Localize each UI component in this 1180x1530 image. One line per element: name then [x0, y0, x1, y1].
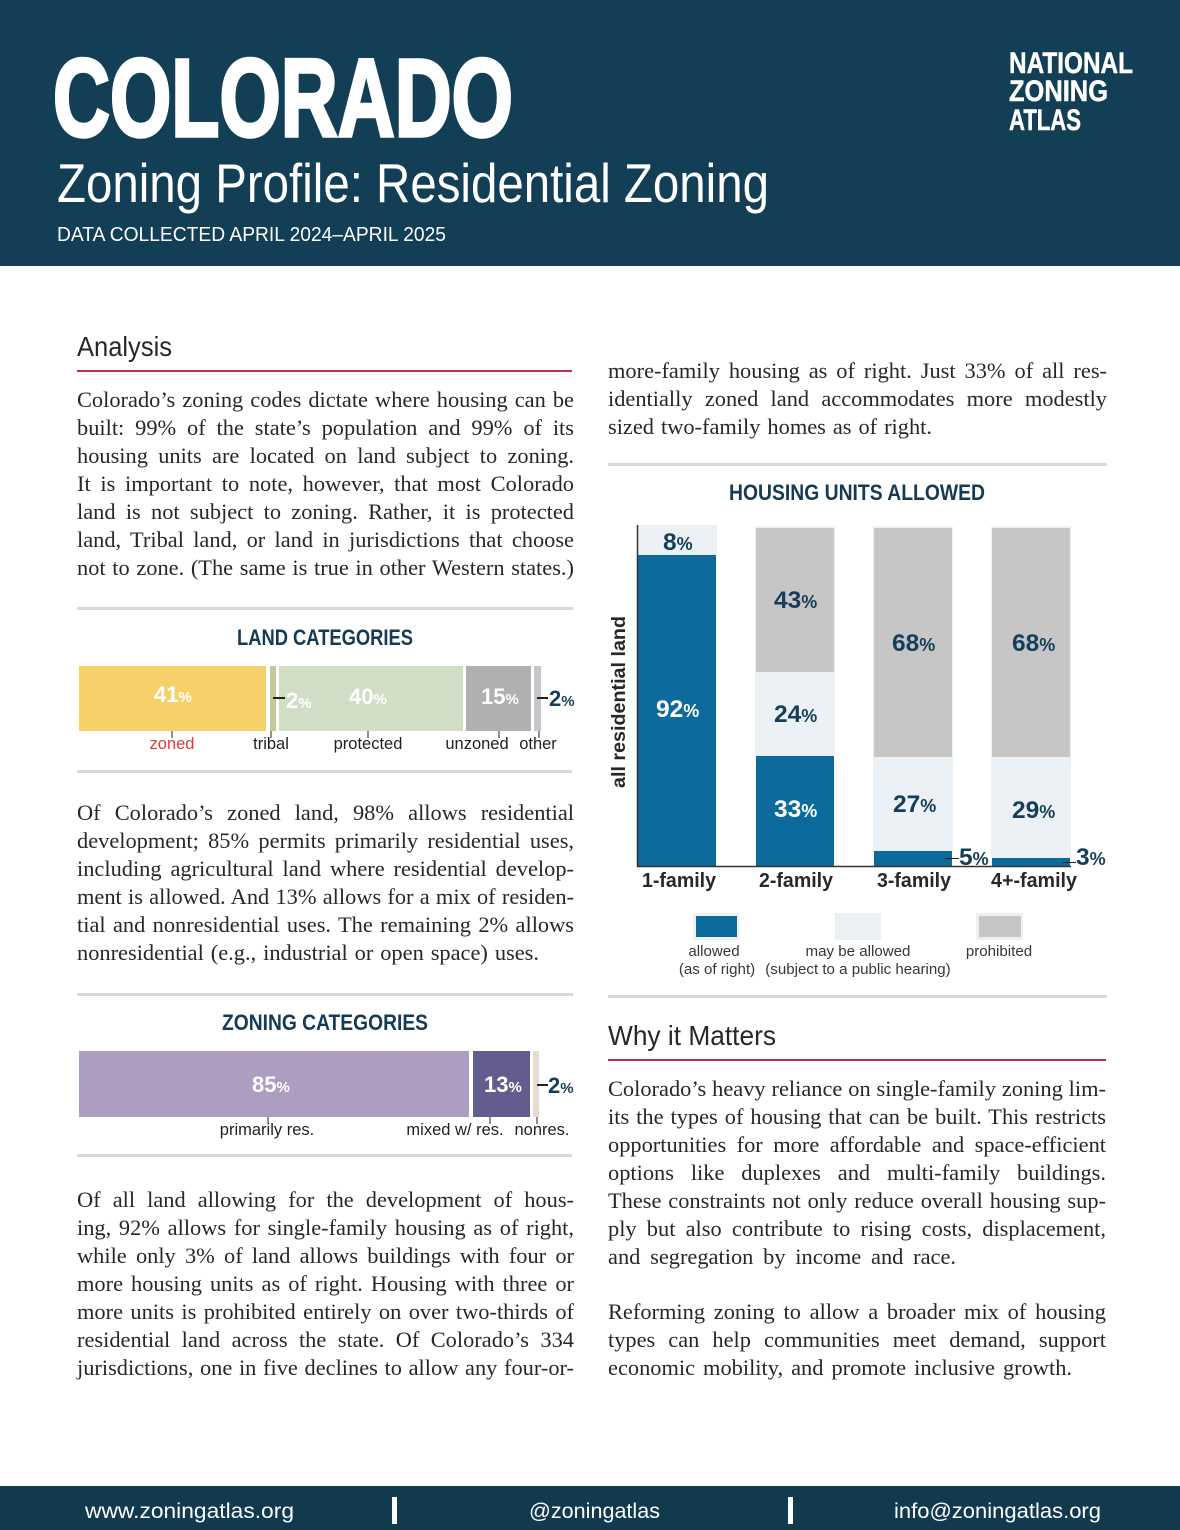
y axis label: all residential land: [609, 616, 630, 788]
axes: [638, 525, 1071, 866]
text block: why it matters: Colorado’s heavy reliance on single-family zoning lim-: [608, 1076, 1106, 1101]
chart: zoning categories: nonres.: [514, 1121, 570, 1139]
logo: National Zoning Atlas: ATLAS: [1009, 104, 1081, 137]
chart: zoning categories: 85%: [252, 1072, 290, 1097]
chart: land categories: 2%: [286, 688, 312, 713]
heading: Analysis: Analysis: [77, 331, 172, 362]
text block: residential land: [76, 1187, 574, 1380]
legend: allowed: [688, 943, 740, 960]
text block: analysis continued: identially zoned land accommodates more modestly: [608, 386, 1107, 411]
bar: 3-family: 68%: [892, 630, 935, 657]
text block: reforming zoning: economic mobility, and promote inclusive growth.: [608, 1355, 1072, 1380]
bar: 1-family: 92%: [656, 696, 699, 723]
text block: analysis intro: It is important to note, however, that most Colorado: [77, 471, 574, 496]
text block: residential land: while only 3% of land allows buildings with four or: [77, 1243, 574, 1268]
text block: residential land: Of all land allowing for the development of hous-: [77, 1187, 574, 1212]
legend: prohibited: [966, 943, 1032, 960]
text block: why it matters: and segregation by income and race.: [608, 1244, 956, 1269]
chart: land categories: tribal: [253, 735, 289, 753]
text block: why it matters: ply but also contribute to rising costs, displacement,: [608, 1216, 1106, 1241]
bar: 2-family: 43%: [774, 587, 817, 614]
text block: zoned land: nonresidential (e.g., industrial or open space) uses.: [77, 940, 539, 965]
text block: residential land: more units is prohibited entirely on over two-thirds of: [77, 1299, 574, 1324]
text block: why it matters: opportunities for more affordable and space-efficient: [608, 1132, 1106, 1157]
text block: zoned land: development; 85% permits primarily residential uses,: [77, 828, 574, 853]
text block: analysis intro: housing units are located on land subject to zoning.: [77, 443, 574, 468]
bar: 3-family: 27%: [893, 791, 936, 818]
chart: land categories: [79, 625, 575, 753]
chart: land categories: unzoned: [445, 735, 509, 753]
chart: land categories: other: [519, 735, 557, 753]
chart: zoning categories: 13%: [484, 1072, 522, 1097]
chart: zoning categories: primarily res.: [220, 1121, 314, 1139]
title: COLORADO: [53, 37, 513, 160]
data collection note: DATA COLLECTED APRIL 2024–APRIL 2025: [57, 223, 446, 246]
bar: 2-family: [755, 526, 835, 866]
footer: www.zoningatlas.org: [84, 1500, 294, 1523]
text block: zoned land: including agricultural land where residential develop-: [77, 856, 574, 881]
chart: land categories: zoned: [150, 735, 194, 753]
category labels: 4+-family: [991, 870, 1078, 892]
logo: National Zoning Atlas: ZONING: [1009, 75, 1108, 108]
chart title: HOUSING UNITS ALLOWED: [729, 480, 985, 505]
chart: land categories: protected: [334, 735, 402, 753]
text block: analysis continued: sized two-family homes as of right.: [608, 414, 932, 439]
bar: 4+-family: [991, 526, 1106, 871]
chart title: ZONING CATEGORIES: [222, 1010, 428, 1035]
text block: zoned land: tial and nonresidential uses. The remaining 2% allows: [77, 912, 574, 937]
text block: analysis intro: Colorado’s zoning codes dictate where housing can be: [77, 387, 574, 412]
chart: land categories: 2%: [549, 686, 575, 711]
chart: zoning categories: [79, 1010, 574, 1139]
footer: @zoningatlas: [529, 1500, 660, 1523]
text block: zoned land: Of Colorado’s zoned land, 98% allows residential: [77, 800, 574, 825]
chart: zoning categories: mixed w/ res.: [406, 1121, 504, 1139]
bar: 2-family: 33%: [774, 796, 817, 823]
bar: 2-family: 24%: [774, 701, 817, 728]
chart: housing units allowed: [609, 480, 1106, 978]
text block: residential land: ing, 92% allows for single-family housing as of right,: [77, 1215, 574, 1240]
text block: residential land: more housing units as of right. Housing with three or: [77, 1271, 574, 1296]
text block: why it matters: [608, 1076, 1106, 1269]
footer: info@zoningatlas.org: [894, 1500, 1101, 1523]
legend: (as of right): [679, 961, 755, 978]
text block: reforming zoning: [608, 1299, 1106, 1380]
chart: land categories: 40%: [349, 684, 387, 709]
category labels: 1-family: [642, 870, 717, 892]
bar: 4+-family: 3%: [1076, 844, 1106, 871]
text block: zoned land: [77, 800, 574, 965]
footer: [0, 1486, 1180, 1530]
heading: Why it Matters: Why it Matters: [608, 1020, 776, 1051]
category labels: 3-family: [877, 870, 952, 892]
bar: 4+-family: 68%: [1012, 630, 1055, 657]
text block: reforming zoning: Reforming zoning to allow a broader mix of housing: [608, 1299, 1106, 1324]
text block: analysis intro: [77, 387, 574, 580]
chart title: LAND CATEGORIES: [237, 625, 413, 650]
chart: zoning categories: 2%: [548, 1073, 574, 1098]
text block: reforming zoning: types can help communities meet demand, support: [608, 1327, 1106, 1352]
header band: [0, 0, 1180, 266]
category labels: [642, 870, 1078, 892]
bar: 4+-family: 29%: [1012, 797, 1055, 824]
text block: analysis intro: land is not subject to zoning. Rather, it is protected: [77, 499, 574, 524]
bar: 3-family: [873, 526, 989, 871]
logo: National Zoning Atlas: [1009, 47, 1133, 137]
bar: 3-family: 5%: [959, 844, 989, 871]
legend: [679, 913, 1032, 978]
text block: analysis continued: more-family housing as of right. Just 33% of all res-: [608, 358, 1107, 383]
text block: analysis intro: not to zone. (The same is true in other Western states.): [77, 555, 574, 580]
bar: 1-family: 8%: [663, 529, 693, 556]
chart: land categories: 41%: [154, 682, 192, 707]
text block: residential land: residential land across the state. Of Colorado’s 334: [77, 1327, 574, 1352]
text block: zoned land: ment is allowed. And 13% allows for a mix of residen-: [77, 884, 574, 909]
text block: why it matters: its the types of housing that can be built. This restricts: [608, 1104, 1106, 1129]
text block: why it matters: These constraints not only reduce overall housing sup-: [608, 1188, 1106, 1213]
text block: residential land: jurisdictions, one in five declines to allow any four-or-: [77, 1355, 574, 1380]
logo: National Zoning Atlas: NATIONAL: [1009, 47, 1133, 80]
text block: analysis continued: [608, 358, 1107, 439]
text block: why it matters: options like duplexes and multi-family buildings.: [608, 1160, 1106, 1185]
text block: analysis intro: built: 99% of the state’s population and 99% of its: [77, 415, 574, 440]
legend: may be allowed: [806, 943, 910, 960]
text block: analysis intro: land, Tribal land, or land in jurisdictions that choose: [77, 527, 574, 552]
chart: land categories: 15%: [481, 684, 519, 709]
subtitle: Zoning Profile: Residential Zoning: [57, 152, 769, 214]
legend: (subject to a public hearing): [765, 961, 951, 978]
category labels: 2-family: [759, 870, 834, 892]
bar: 1-family: [638, 525, 717, 866]
